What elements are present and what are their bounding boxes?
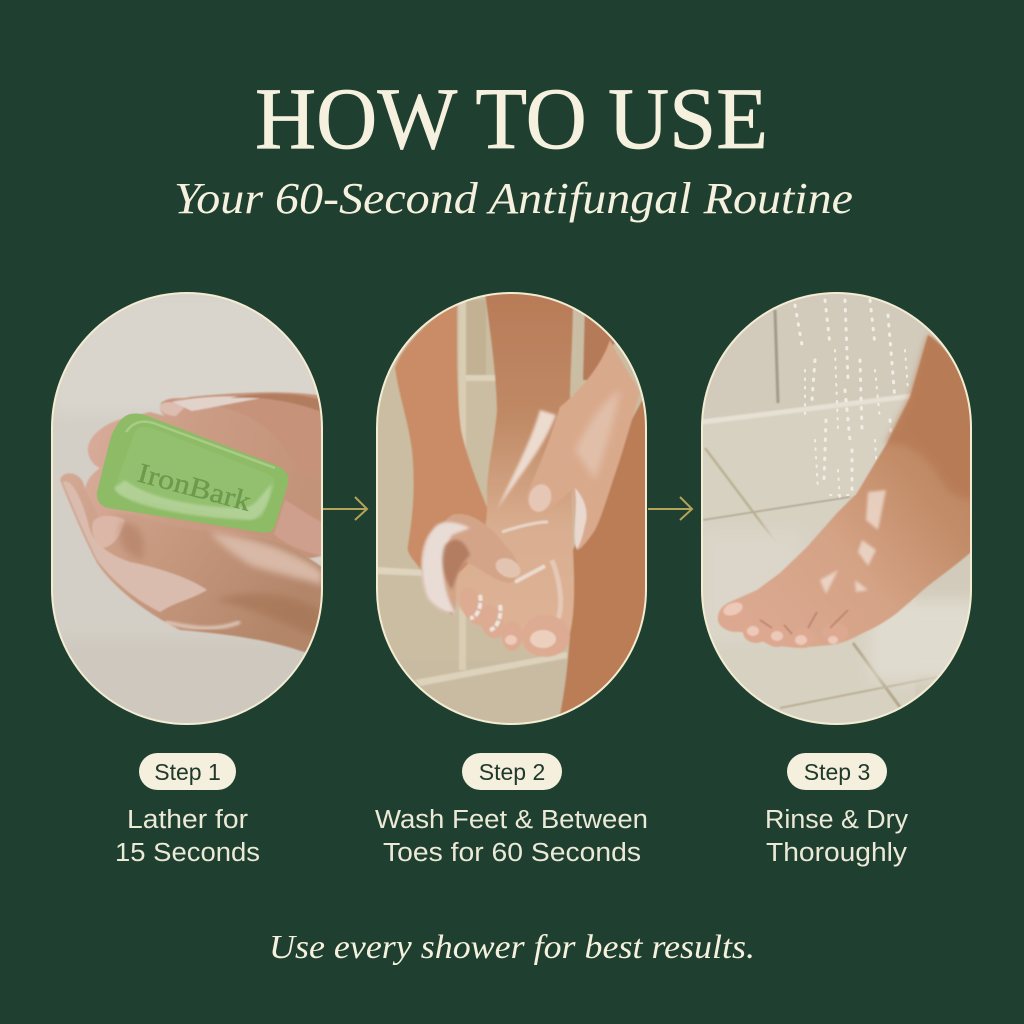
step 1 caption xyxy=(115,753,260,867)
icon: shower water droplets xyxy=(795,300,908,500)
icon: right leg xyxy=(558,393,646,724)
step 3 description: Rinse & Dry xyxy=(765,806,908,834)
step 2 badge: Step 2 xyxy=(479,759,545,785)
step 1 badge xyxy=(139,753,236,790)
icon: thumb and lathered hand xyxy=(421,514,518,613)
step 2 description: Toes for 60 Seconds xyxy=(383,839,641,867)
step 1 description: 15 Seconds xyxy=(115,839,260,867)
step 1 badge: Step 1 xyxy=(154,759,221,785)
title: HOW TO USE xyxy=(255,71,768,168)
step 1 description: Lather for xyxy=(127,806,249,834)
icon: centre shin and foot xyxy=(454,293,574,656)
step 2 caption xyxy=(375,753,648,867)
panel: step 3 photo, rinsing foot xyxy=(702,293,980,740)
icon: lower hand with lather xyxy=(60,473,322,652)
panel: step 2 photo, washing foot xyxy=(377,293,646,724)
arrow: step 2 to step 3 xyxy=(648,497,692,520)
step 2 description xyxy=(375,806,648,867)
icon: right hand xyxy=(527,340,640,550)
step 3 badge xyxy=(787,753,887,790)
panel: step 1 photo, soap in hands xyxy=(52,293,322,730)
step 3 caption xyxy=(765,753,908,867)
floor tiles xyxy=(703,310,970,709)
icon: green soap bar with IronBark imprint: IronBark xyxy=(134,458,254,518)
icon: green soap bar with IronBark imprint xyxy=(97,414,289,533)
step 2 badge xyxy=(462,753,562,790)
step 3 description xyxy=(765,806,908,867)
icon: toes xyxy=(468,617,570,658)
icon: upper hand xyxy=(85,392,322,560)
icon: left arm xyxy=(394,306,488,615)
icon: toenails and toes xyxy=(718,608,807,648)
step 1 description xyxy=(115,806,260,867)
arrow: step 1 to step 2 xyxy=(323,497,367,520)
step 3 badge: Step 3 xyxy=(804,759,870,785)
icon: wet foot xyxy=(718,335,975,648)
subtitle: Your 60-Second Antifungal Routine xyxy=(174,174,853,223)
step 2 description: Wash Feet & Between xyxy=(375,806,648,834)
step 3 description: Thoroughly xyxy=(766,839,907,867)
footer note: Use every shower for best results. xyxy=(269,929,755,966)
